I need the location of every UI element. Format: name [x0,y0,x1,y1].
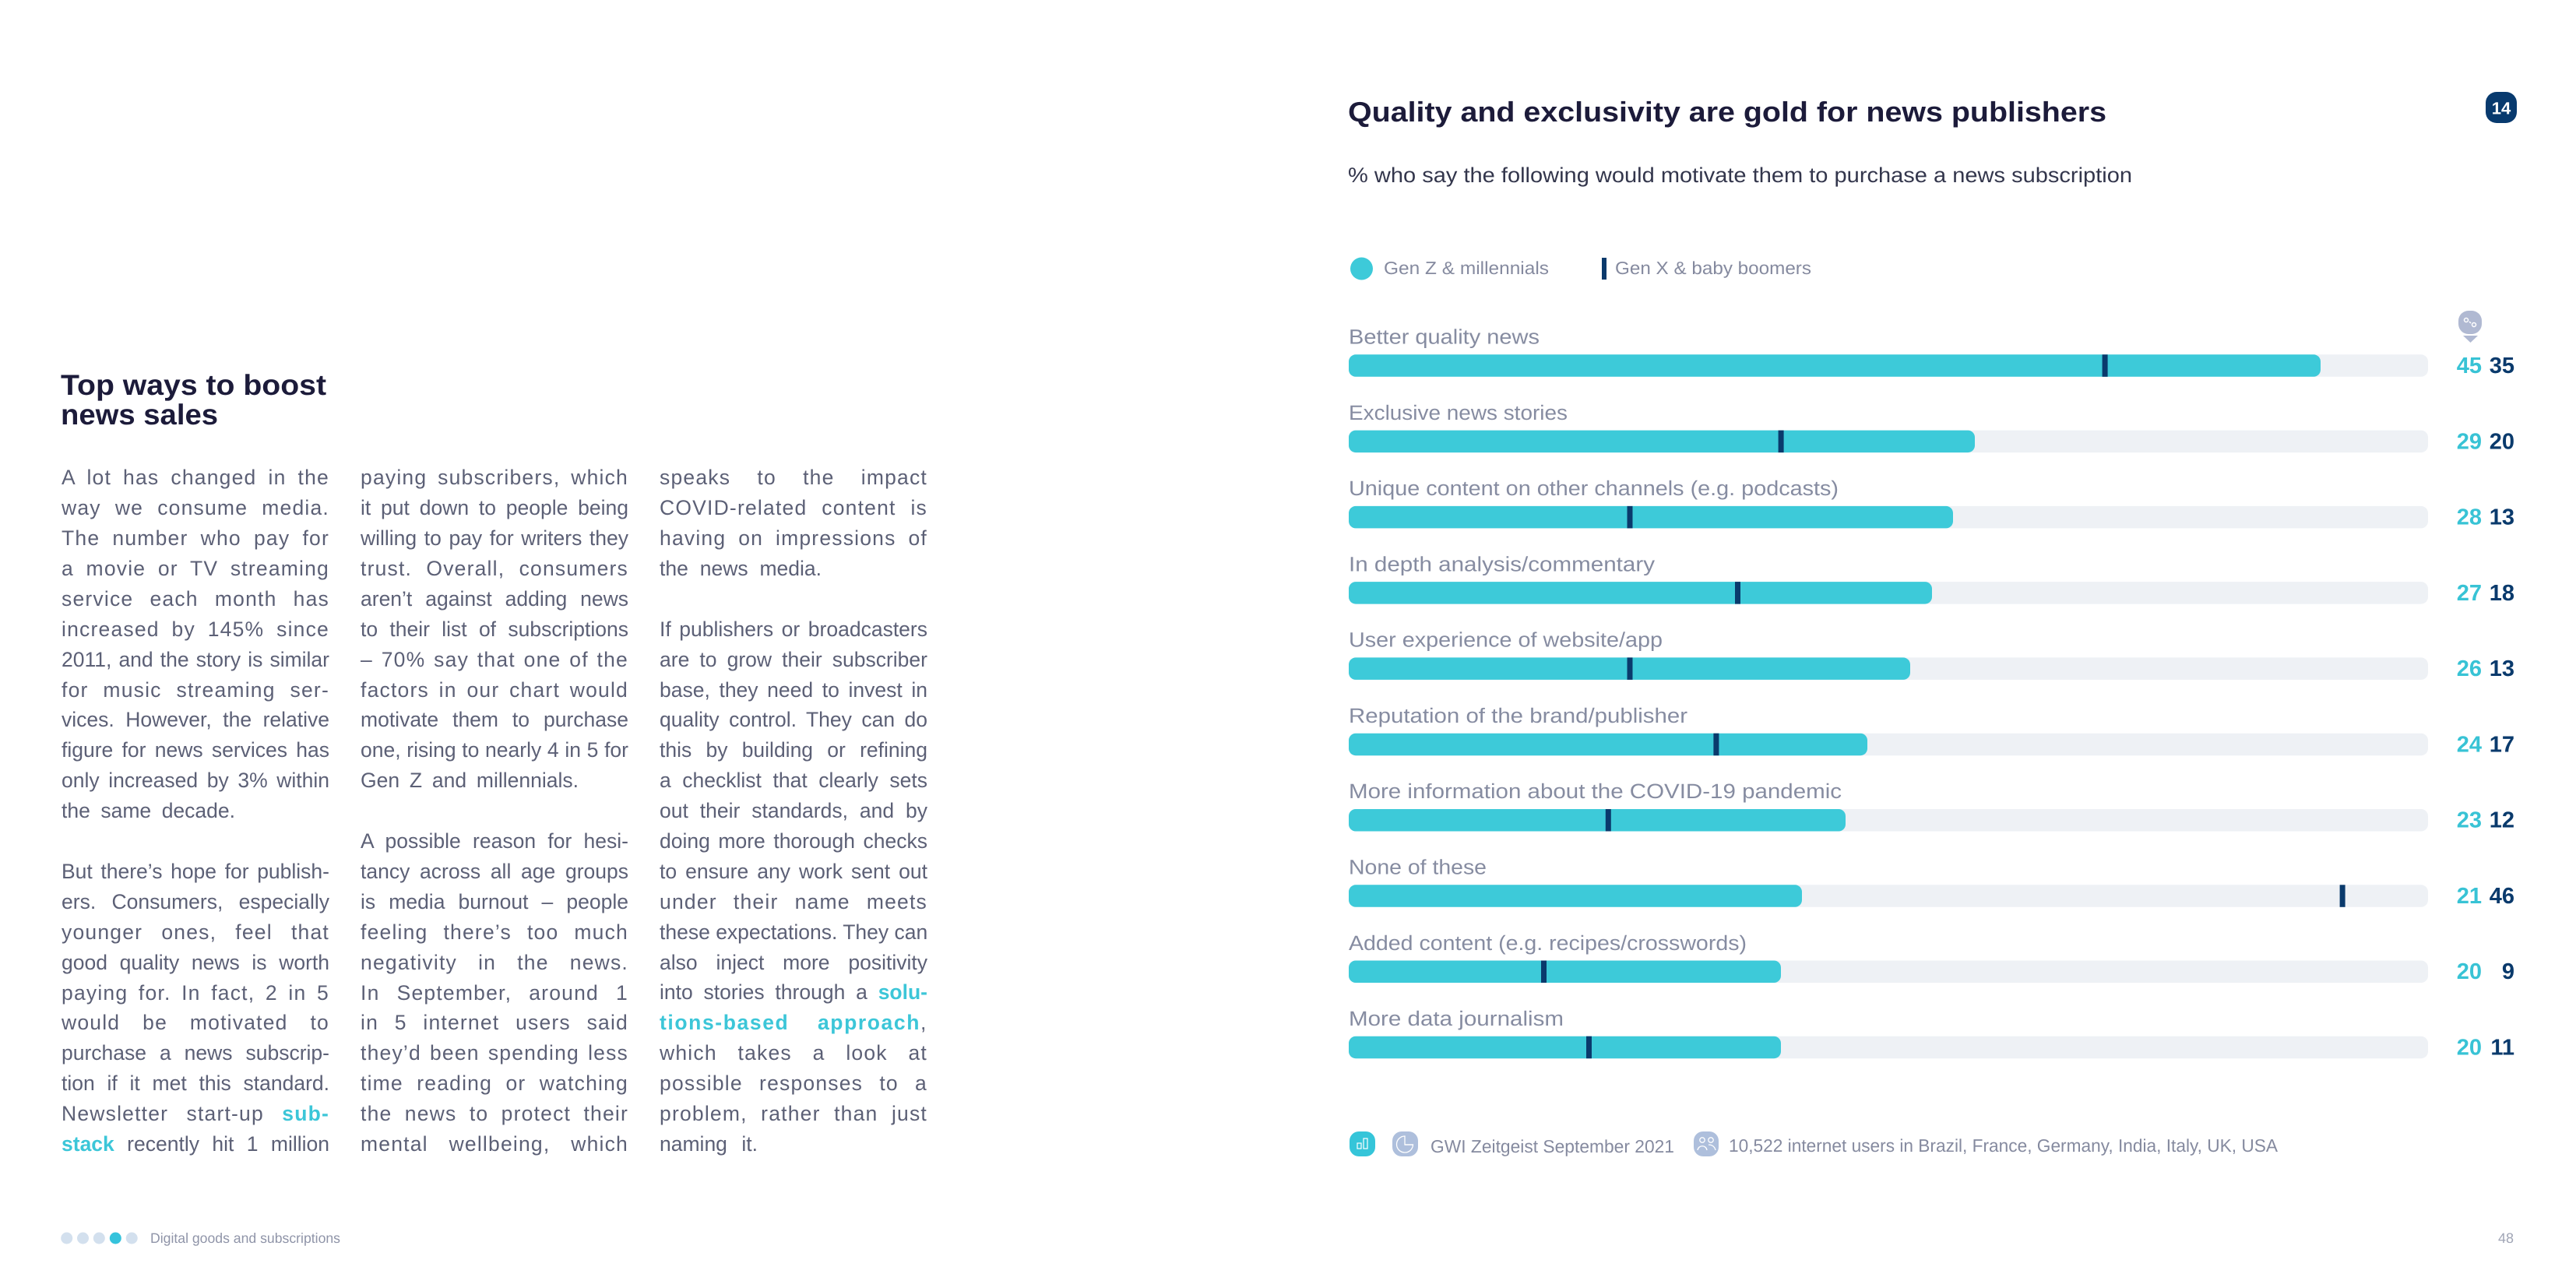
paragraph: media consumption: for music streaming ser- [62,678,329,702]
page number: 48 [2498,1230,2514,1246]
section name: Digital goods and subscriptions [150,1230,340,1246]
paragraph: hope for publishers: ers. Consumers, especially [62,890,329,913]
paragraph: media consumption: service each month has [62,587,329,611]
paragraph: hope for publishers: Newsletter start-up sub- [62,1102,329,1125]
paragraph: invest in quality control: quality control. They can do [660,708,927,731]
legend item: Gen Z and millennials: Gen Z & millennials [1384,258,1549,278]
row: unique content on other channels: 13 [2490,505,2514,530]
row: reputation of the brand: 17 [2490,732,2514,757]
paragraph: media burnout: A possible reason for hesi- [361,829,628,853]
paragraph: media burnout: the news to protect their [361,1102,628,1125]
row: none of these: 46 [2490,884,2514,909]
paragraph: paying subscribers: paying subscribers, which [361,466,628,489]
paragraph: media consumption: only increased by 3% within [62,769,329,792]
row: none of these: None of these [1349,855,1487,878]
row: in depth analysis: 27 [2457,581,2482,606]
row: better quality news [1349,326,2514,378]
paragraph: invest in quality control: these expectations. They can [660,920,927,944]
source: GWI Zeitgeist: GWI Zeitgeist September 2021 [1431,1136,1674,1156]
row: unique content on other channels: Unique content on other channels (e.g. podcasts) [1349,477,1839,500]
paragraph: paying subscribers: it put down to people being [361,496,628,519]
paragraph: impact of covid content: COVID-related content is [660,496,927,519]
row: reputation of the brand: Reputation of the brand/publisher [1349,704,1687,727]
paragraph: paying subscribers: aren’t against adding news [361,587,628,611]
paragraph: media burnout: feeling there’s too much [361,920,628,944]
legend [1350,257,1811,280]
row: added content: Added content (e.g. recipes/crosswords) [1349,931,1747,955]
paragraph: invest in quality control: are to grow their subscriber [660,648,927,671]
row: exclusive news stories: 20 [2490,429,2514,454]
paragraph: media consumption: way we consume media. [62,496,329,519]
icon: people [1694,1131,1719,1156]
row: more data journalism: 20 [2457,1036,2482,1061]
row: more data journalism: More data journalism [1349,1007,1564,1030]
row: none of these: 21 [2457,884,2482,909]
row: covid information: 12 [2490,808,2514,833]
row: in depth analysis: 18 [2490,581,2514,606]
paragraph: invest in quality control: doing more thorough checks [660,829,927,853]
paragraph: invest in quality control: If publishers or broadcasters [660,618,927,641]
badge: chart number 14: 14 [2492,98,2511,118]
row: in depth analysis: In depth analysis/commentary [1349,552,1656,575]
paragraph: impact of covid content: the news media. [660,557,822,580]
row: user experience [1349,628,2514,681]
paragraph: media burnout: In September, around 1 [361,981,628,1005]
row: covid information: 23 [2457,808,2482,833]
paragraph: media burnout: mental wellbeing, which [361,1132,628,1156]
paragraph: invest in quality control: possible responses to a [660,1072,927,1095]
paragraph: impact of covid content: having on impressions of [660,526,927,550]
paragraph: hope for publishers: But there’s hope for publish- [62,860,329,883]
paragraph: hope for publishers: younger ones, feel that [62,920,329,944]
paragraph: hope for publishers [62,860,329,1156]
row: better quality news: Better quality news [1349,326,1540,349]
row: unique content on other channels [1349,477,2514,530]
paragraph: hope for publishers: tion if it met this standard. [62,1072,329,1095]
paragraph: paying subscribers: trust. Overall, consumers [361,557,628,580]
source line [1350,1131,2279,1156]
subtitle: chart question: % who say the following would motivate them to purchase a news subscription [1348,164,2132,187]
paragraph: invest in quality control: which takes a look at [660,1041,927,1065]
paragraph: media consumption: vices. However, the relative [62,708,329,731]
paragraph: invest in quality control: to ensure any work sent out [660,860,927,883]
paragraph: invest in quality control: base, they need to invest in [660,678,927,702]
paragraph: paying subscribers: willing to pay for writers they [361,526,628,550]
icon: pie chart [1392,1131,1418,1156]
progress dots [61,1232,138,1244]
row: user experience: User experience of website/app [1349,628,1663,652]
paragraph: invest in quality control: under their name meets [660,890,927,913]
legend item: Gen X and baby boomers: Gen X & baby boomers [1615,258,1811,278]
paragraph: paying subscribers: Gen Z and millennials. [361,769,579,792]
paragraph: impact of covid content: speaks to the impact [660,466,927,489]
row: user experience: 26 [2457,656,2482,681]
paragraph: invest in quality control: a checklist that clearly sets [660,769,927,792]
row: reputation of the brand: 24 [2457,732,2482,757]
paragraph: paying subscribers: to their list of subscriptions [361,618,628,641]
row: added content [1349,931,2514,984]
row: added content: 20 [2457,959,2482,984]
row: exclusive news stories [1349,401,2514,454]
paragraph: paying subscribers: one, rising to nearly 4 in 5 for [361,738,628,762]
paragraph: invest in quality control: also inject more positivity [660,951,927,974]
icon: bar chart [1350,1131,1375,1156]
paragraph: paying subscribers [361,466,628,792]
paragraph: invest in quality control [660,618,927,1156]
heading: top ways to boost news sales [61,369,326,431]
paragraph: invest in quality control: into stories through a solu- [660,980,927,1004]
row: more data journalism: 11 [2490,1036,2514,1061]
row: none of these [1349,855,2514,909]
paragraph: hope for publishers: purchase a news subscrip- [62,1041,329,1065]
row: exclusive news stories: Exclusive news stories [1349,401,1568,424]
paragraph: invest in quality control: problem, rather than just [660,1102,927,1125]
title: quality and exclusivity: Quality and exclusivity are gold for news publishers [1348,96,2106,128]
paragraph: media burnout: tancy across all age groups [361,860,628,883]
row: covid information [1349,779,2514,833]
paragraph: invest in quality control: tions-based approach, [660,1011,927,1034]
row: unique content on other channels: 28 [2457,505,2482,530]
paragraph: invest in quality control: this by building or refining [660,738,927,762]
row: added content: 9 [2502,959,2514,984]
heading: top ways to boost news sales: Top ways to boost [61,369,326,401]
paragraph: media consumption: figure for news services has [62,738,329,762]
row: covid information: More information about the COVID-19 pandemic [1349,779,1842,803]
row: in depth analysis [1349,552,2514,606]
paragraph: media consumption: the same decade. [62,799,235,822]
bar chart: motivations for news subscription [1349,326,2514,1061]
paragraph: hope for publishers: stack recently hit 1 million [62,1132,329,1156]
paragraph: media consumption: The number who pay for [62,526,329,550]
badge: chart number 14 [2486,92,2517,123]
paragraph: media consumption: A lot has changed in the [62,466,329,489]
paragraph: media burnout: time reading or watching [361,1072,628,1095]
paragraph: media consumption: 2011, and the story is similar [62,648,329,671]
paragraph: media consumption: increased by 145% since [62,618,329,641]
paragraph: paying subscribers: factors in our chart would [361,678,628,702]
row: better quality news: 45 [2457,354,2482,378]
row: reputation of the brand [1349,704,2514,757]
paragraph: invest in quality control: naming it. [660,1132,758,1156]
row: user experience: 13 [2490,656,2514,681]
paragraph: hope for publishers: would be motivated to [62,1011,329,1034]
footer: section progress [61,1230,340,1246]
paragraph: media burnout: in 5 internet users said [361,1011,628,1034]
paragraph: media burnout [361,829,628,1156]
paragraph: media consumption: a movie or TV streaming [62,557,329,580]
sample: internet users: 10,522 internet users in Brazil, France, Germany, India, Italy, UK, USA [1729,1135,2279,1156]
row: more data journalism [1349,1007,2514,1061]
paragraph: invest in quality control: out their standards, and by [660,799,927,822]
paragraph: paying subscribers: – 70% say that one of the [361,648,628,671]
heading: top ways to boost news sales: news sales [61,399,218,431]
row: exclusive news stories: 29 [2457,429,2482,454]
paragraph: media burnout: is media burnout – people [361,890,628,913]
icon: percent marker [2458,311,2482,343]
paragraph: hope for publishers: paying for. In fact, 2 in 5 [62,981,329,1005]
row: better quality news: 35 [2490,354,2514,378]
paragraph: media burnout: they’d been spending less [361,1041,628,1065]
paragraph: media burnout: negativity in the news. [361,951,628,974]
paragraph: impact of covid content [660,466,927,580]
paragraph: hope for publishers: good quality news is worth [62,951,329,974]
paragraph: paying subscribers: motivate them to purchase [361,708,628,731]
paragraph: media consumption [62,466,329,822]
